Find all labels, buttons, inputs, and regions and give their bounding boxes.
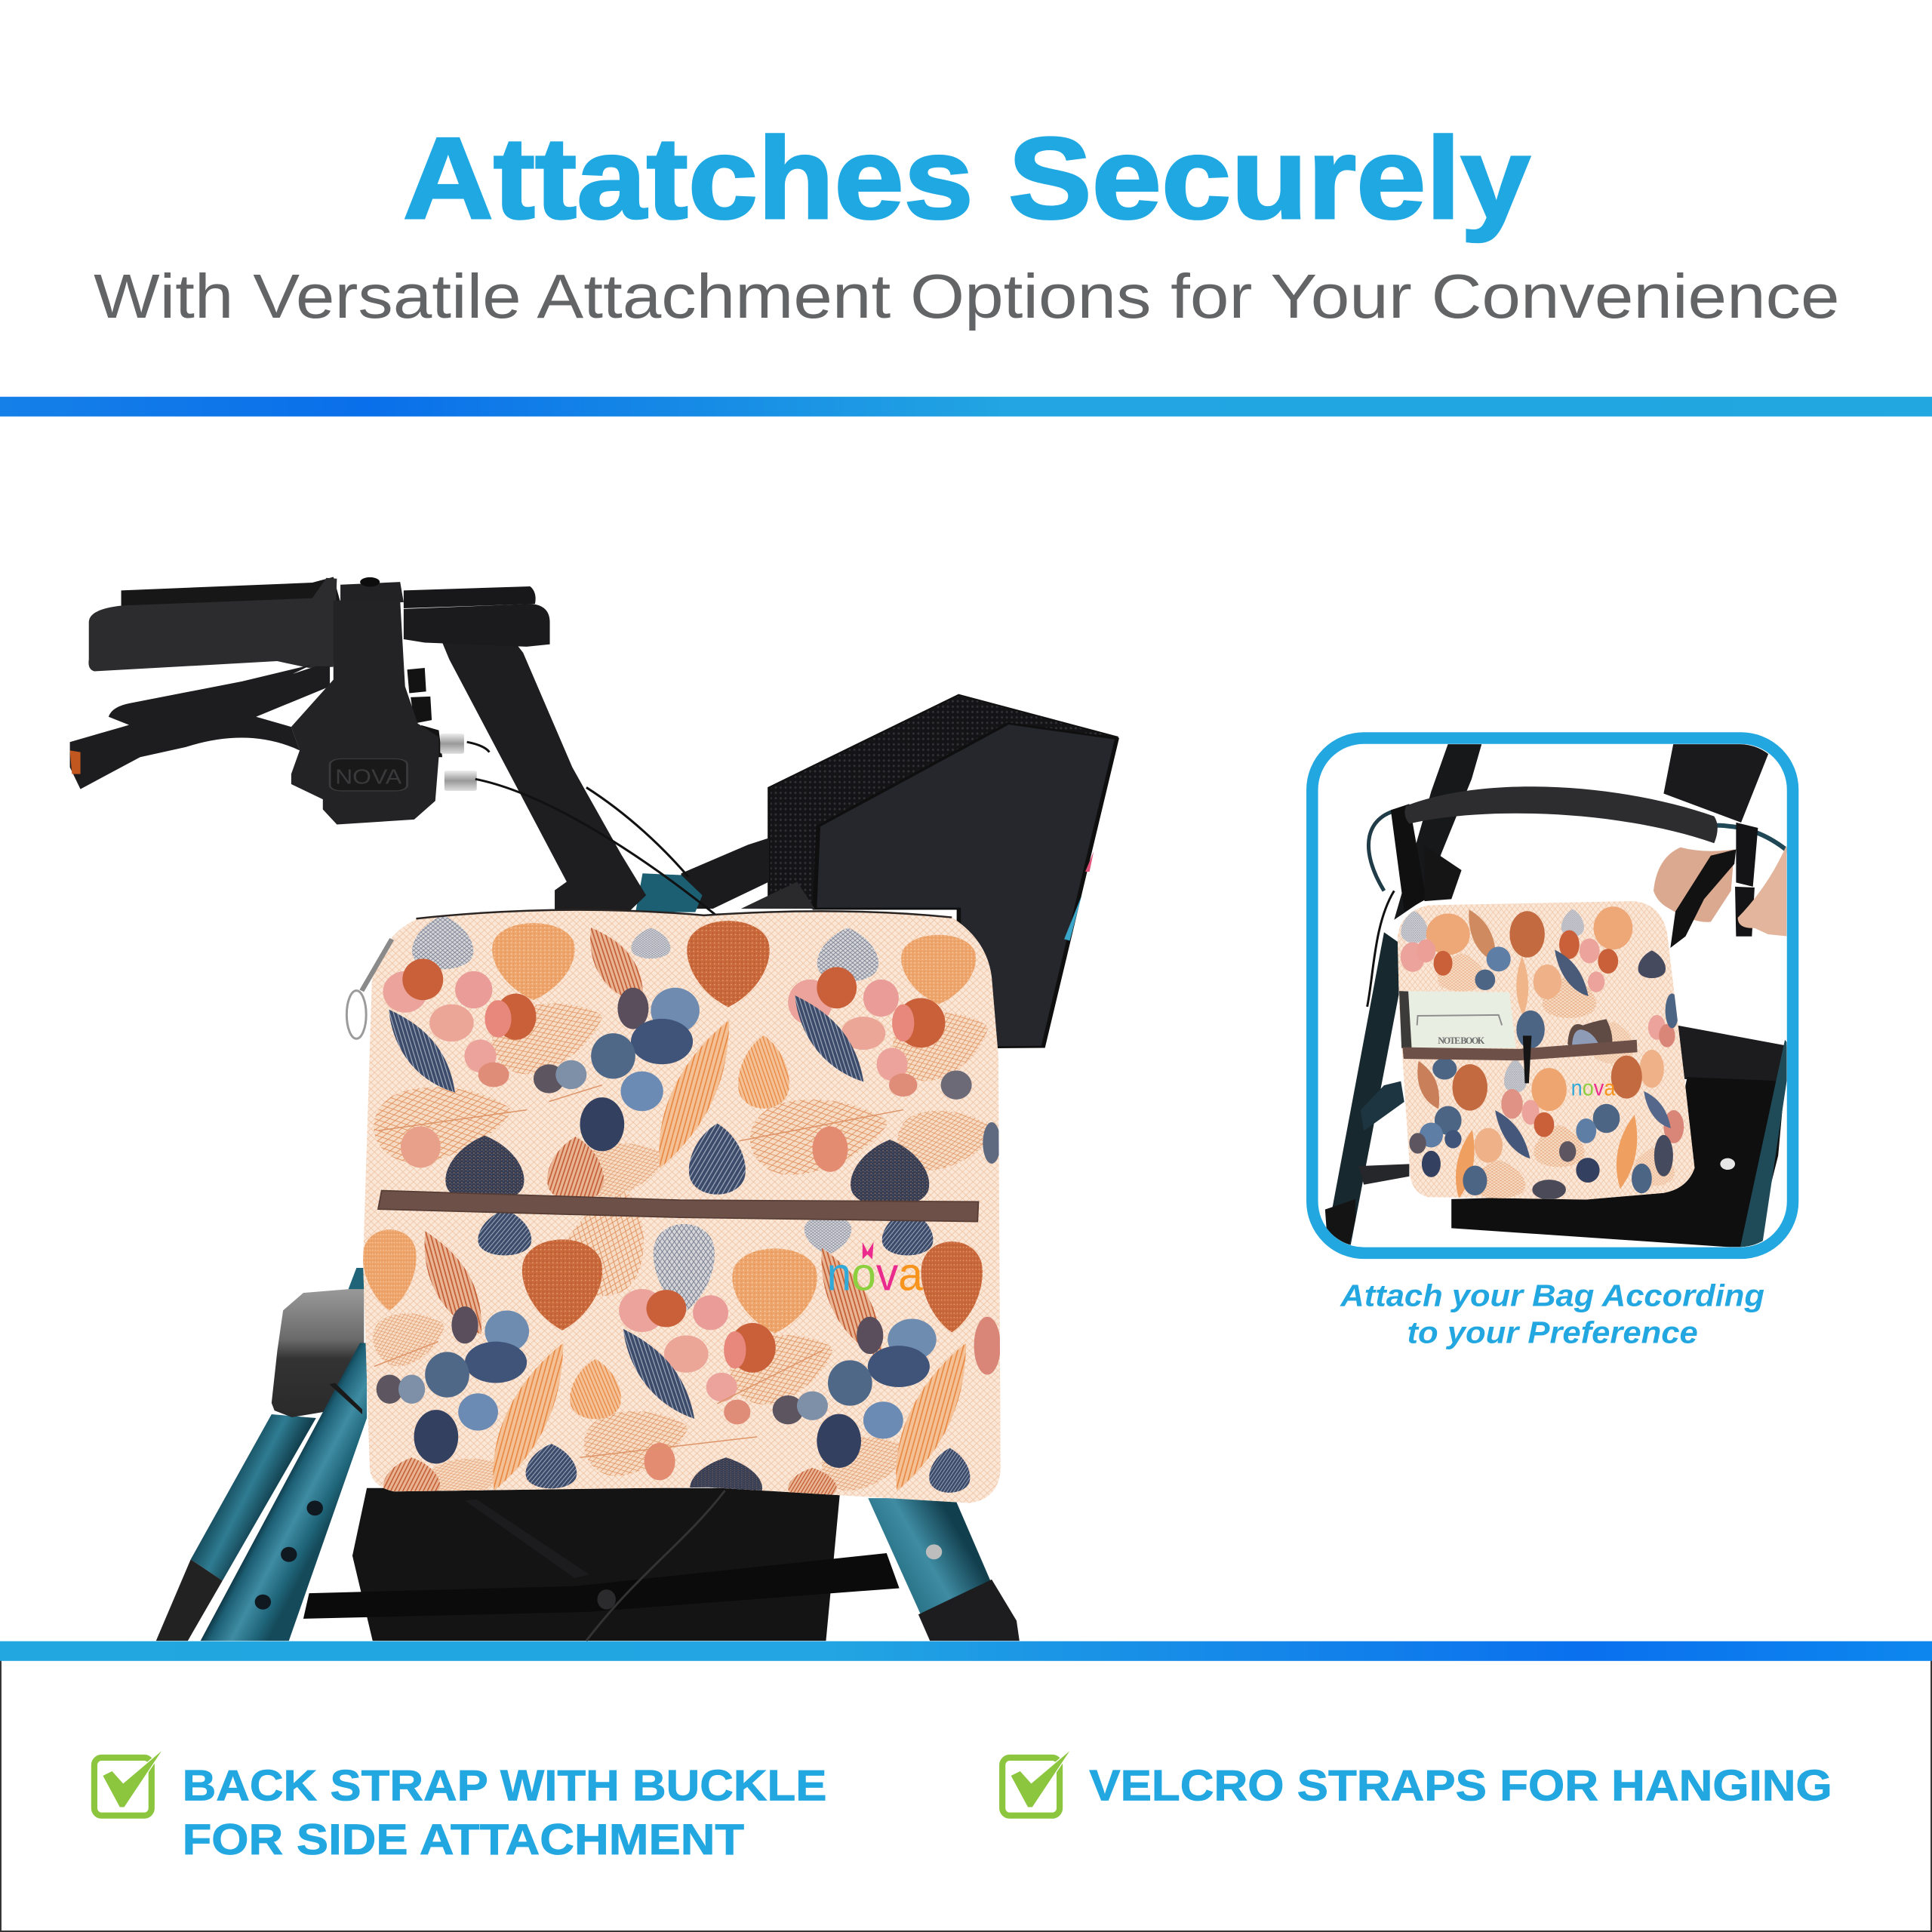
hanging strap in hand [1670,850,1736,948]
rollator lower: seat, legs, basket, cross bars [156,1268,1020,1641]
bottom panel [1,1660,1931,1931]
right leg [868,1498,992,1616]
leaf print [358,903,1005,1507]
seat [1677,1026,1789,1081]
icon: green check box [94,1749,164,1816]
silver cable adjusters [440,734,477,791]
top rail left [1366,808,1396,892]
back tube [404,586,536,608]
basket [352,1488,841,1641]
sunglasses [1567,1019,1612,1052]
brake lever [70,665,330,789]
leaf stems [374,1085,903,1457]
right leg [1740,1040,1787,1247]
right strap and buckle [1735,823,1758,937]
front tube [404,604,550,647]
top zipper [416,910,952,918]
seat back logo peek [1085,851,1094,872]
front grip [88,578,337,671]
title: Attatches Securely [403,113,1531,243]
inset frame [1312,738,1793,1253]
bag body [363,910,1001,1503]
left hand [1654,848,1734,922]
inset bag [1398,901,1694,1199]
inset leaf print [1394,899,1697,1201]
bolt [597,1589,616,1610]
notebook label: NOTE BOOK [1438,1035,1485,1046]
zipper pull [359,938,394,992]
cable [586,1491,725,1641]
NOVA badge text: NOVA [335,764,402,788]
seat back rear mesh [769,695,1117,909]
lever tip [70,750,81,774]
front leg [201,1343,367,1641]
upper leg sliver [349,1268,367,1289]
inset nova logo: nova [1571,1075,1616,1100]
clamp [340,582,404,604]
text: back strap: BACK STRAP WITH BUCKLE [183,1761,827,1810]
rear leg sleeve [156,1559,223,1641]
inset photo: attaching the bag [1312,738,1793,1253]
brake cables [467,742,716,915]
inset caption: to your Preference [1407,1315,1698,1350]
nova embroidered logo: nova [827,1248,923,1300]
arm sleeve [1663,742,1773,823]
foot sleeve [1325,1199,1355,1247]
inset caption [1340,1278,1764,1350]
left leg [1328,932,1399,1245]
rear leg [191,1414,316,1580]
bottom gradient bar [0,1641,1932,1661]
leg holes [255,1500,323,1610]
feature: back strap [94,1749,827,1864]
zipper ring [346,991,366,1038]
rollator upper: handlebar, brake, stem and seat back [70,577,1117,1048]
seat back front panel [815,724,1117,1048]
zipper pull [1523,1035,1531,1083]
notebook [1399,991,1516,1048]
brake body [291,601,438,825]
main patterned bag [346,903,1005,1507]
rivet [926,1544,942,1559]
inset scene [1325,742,1792,1251]
subtitle: With Versatile Attachment Options for Your Convenience [94,262,1840,331]
top gradient bar [0,397,1932,417]
brown pocket strap [1402,1040,1638,1060]
curved back pad [1404,786,1718,843]
frame diagonal [465,1500,589,1578]
teal connector [635,873,703,912]
inset caption: Attach your Bag According [1340,1278,1764,1313]
seat strap [329,1383,362,1414]
brake block [1424,856,1461,901]
under seat plate [1451,1077,1785,1249]
NOVA badge plate [330,759,408,791]
icon: green check box [1002,1749,1072,1816]
notebook spine [1399,991,1412,1048]
brake buttons [408,668,442,757]
right hand [1738,845,1789,937]
right rail [1711,826,1789,851]
stem [442,627,646,912]
seat back arm [678,838,769,909]
left strap [1391,804,1426,912]
left cable [1367,891,1394,1007]
rear grip [122,577,340,608]
right leg sleeve [918,1580,1020,1641]
cross bars [303,1553,900,1619]
text: velcro straps: VELCRO STRAPS FOR HANGING [1089,1761,1832,1810]
text: back strap: FOR SIDE ATTACHMENT [183,1816,744,1864]
notebook ornament [1417,1015,1502,1026]
text: back strap [183,1761,827,1864]
feature: velcro straps [1002,1749,1832,1816]
seat [272,1288,364,1417]
brown webbing strap [378,1191,978,1222]
rear post [1394,744,1481,920]
